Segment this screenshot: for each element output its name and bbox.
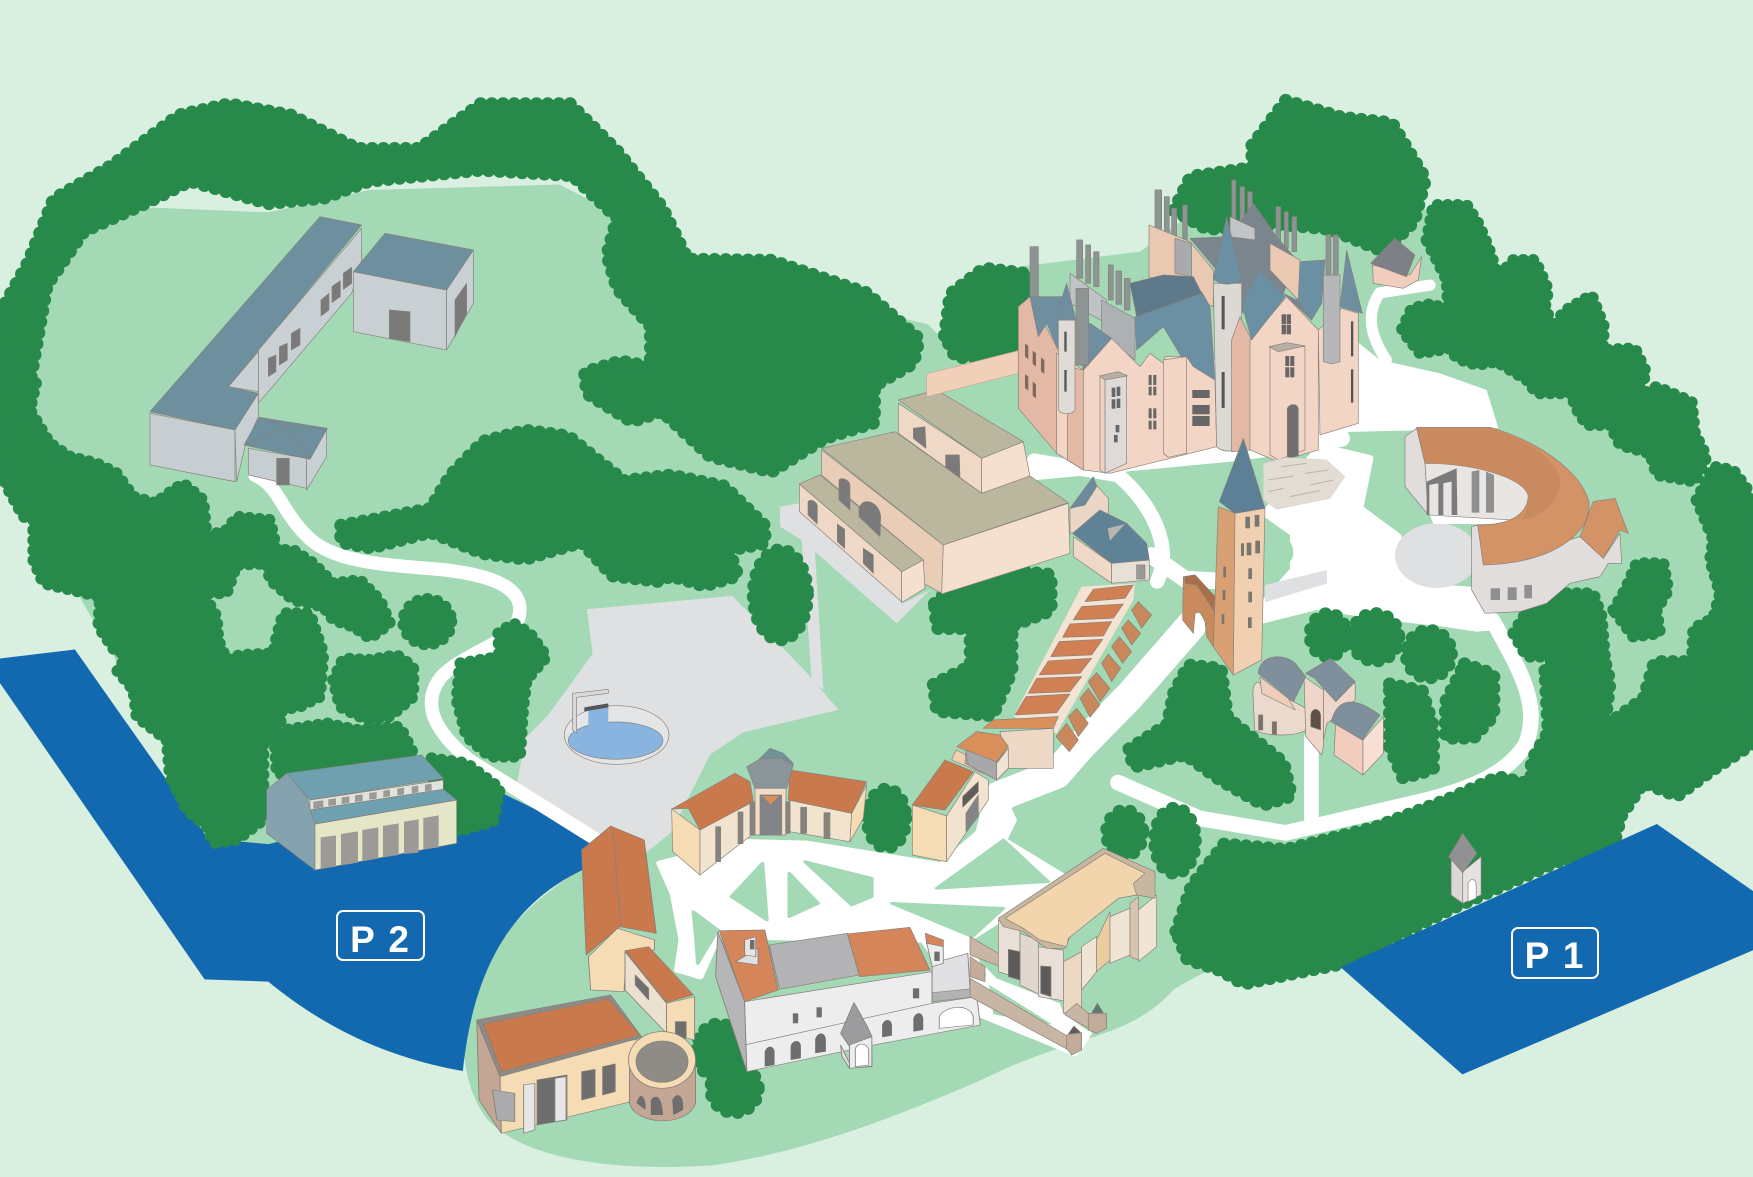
building: south-east palace with wall: [970, 848, 1157, 1055]
building: U-shaped court: [672, 748, 867, 875]
road: chapel to tower: [1152, 556, 1224, 581]
tree: behind castle: [945, 268, 1034, 358]
fountain: [564, 689, 669, 764]
building: small chapel: [1070, 477, 1149, 583]
label: P2: P 2: [350, 919, 411, 960]
gray service paths: [780, 503, 930, 690]
trees: middle belt: [341, 430, 765, 586]
door tower: [1105, 375, 1127, 473]
east gable: [1232, 317, 1252, 452]
building: west warehouse: [150, 217, 473, 490]
road: castle forecourt: [1034, 438, 1342, 472]
building: long exhibition hall: [799, 390, 1070, 603]
road: main avenue: [984, 626, 1191, 863]
road: east loop: [1118, 620, 1531, 833]
tree column near plaza: [754, 550, 807, 639]
trees: southern belt: [1176, 777, 1560, 984]
trees: east edge: [1690, 467, 1753, 713]
building: amphitheatre: [1395, 427, 1628, 613]
tree: single round: [403, 599, 451, 644]
wall turret: [1067, 1033, 1082, 1055]
white road area: [660, 800, 1088, 1053]
chimneys: [1030, 180, 1338, 310]
gray strip beside tower: [1265, 570, 1327, 602]
trees: west belt: [0, 380, 390, 843]
perimeter wall behind castle: [927, 351, 1018, 397]
building: east gate houses: [912, 733, 1008, 862]
parking area P2: [0, 650, 590, 1071]
shrine: [1449, 833, 1481, 903]
building: stall row: [957, 583, 1152, 780]
road network: [255, 285, 1531, 863]
trees: south of hall: [934, 570, 1051, 716]
trees: north-west and central belt: [0, 104, 919, 472]
southern road junction: [660, 800, 1088, 1053]
road: west drive: [255, 475, 598, 841]
trees: east clump B: [1513, 593, 1607, 680]
trees: north-east crown: [1174, 101, 1425, 252]
building: hall by P2: [267, 755, 457, 870]
trees: behind hall: [275, 723, 413, 780]
center turret: [1213, 283, 1242, 451]
building: main castle: [1018, 180, 1362, 473]
terrace: [1263, 457, 1345, 509]
left turret: [1058, 320, 1075, 414]
plaza: [517, 596, 838, 855]
building: abbey: [716, 927, 980, 1072]
small tower: [1065, 1003, 1088, 1028]
trees: south-east mass: [1529, 643, 1753, 859]
building: south-west barn: [582, 826, 695, 1040]
lawn patch by tower: [1265, 530, 1293, 570]
trees: east of hall: [432, 758, 500, 832]
trees: east clump A: [1613, 563, 1668, 637]
label: P2: [337, 911, 424, 960]
porch: [841, 1045, 850, 1068]
rotunda: [629, 1060, 696, 1121]
label: P1: [1512, 928, 1598, 978]
lawn islands: [693, 840, 1048, 963]
lodge: [1371, 238, 1422, 288]
road: chapel loop: [1034, 461, 1163, 581]
trees: east belt: [1402, 205, 1707, 482]
parking area P1: [1340, 824, 1753, 1074]
palace roof: [998, 848, 1155, 948]
white central square: [1260, 447, 1497, 628]
trees: east inner lower: [1129, 665, 1291, 805]
forest: west: [0, 380, 547, 843]
building: south-west house and rotunda: [477, 995, 696, 1133]
white strip behind wall: [985, 967, 1087, 1037]
east wing: [1318, 308, 1358, 435]
garden wall: [970, 937, 998, 966]
forecourt paved white area: [1213, 333, 1498, 447]
forest: east: [1402, 205, 1753, 713]
trees: by plaza: [457, 623, 547, 757]
palace apse walls: [998, 920, 1020, 978]
trees: columns south-east: [1390, 684, 1433, 778]
road: south branch: [1305, 738, 1318, 822]
road: lodge drive: [1371, 285, 1430, 360]
label: P1: P 1: [1525, 935, 1585, 976]
trees: small group by road: [1310, 614, 1346, 656]
single trees: [868, 789, 906, 847]
trees: clump west of road: [333, 655, 413, 720]
bell tower: [1183, 438, 1265, 675]
domed gatehouse: [1253, 657, 1383, 775]
palace side walls: [1063, 952, 1082, 1013]
